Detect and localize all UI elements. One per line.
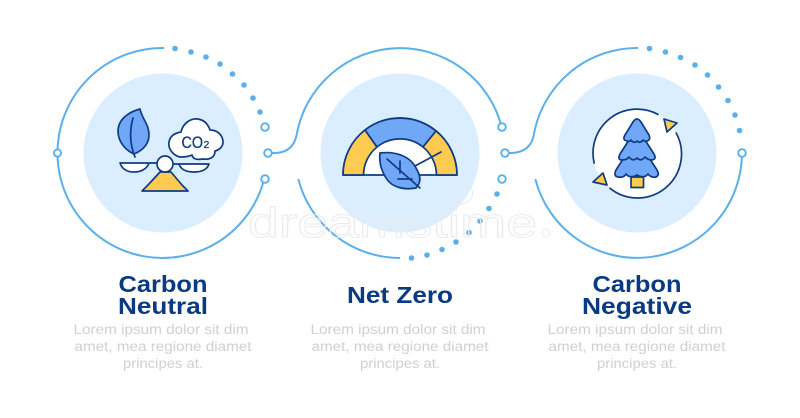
heading: carbon neutral: Carbon — [118, 271, 208, 297]
tree tier top — [624, 119, 650, 142]
icon: gauge with leaf — [343, 118, 457, 189]
body text 2: amet, mea regione diamet — [312, 339, 489, 354]
body text 3: amet, mea regione diamet — [548, 339, 726, 354]
bottom ring arc 3 — [535, 153, 742, 258]
heading: carbon neutral: Neutral — [118, 293, 208, 319]
leaf — [380, 153, 420, 189]
dotted arc 1 — [172, 46, 263, 115]
cycle arc top — [593, 109, 658, 163]
ring arc 1 — [57, 48, 264, 258]
heading: net zero: Net Zero — [347, 282, 453, 308]
gauge right segment — [423, 131, 457, 175]
arrowhead top — [664, 119, 677, 132]
watermark: dreamstime — [248, 199, 537, 246]
body text 3: Lorem ipsum dolor sit dim — [548, 322, 722, 337]
connector and top ring arc 2 — [268, 48, 502, 153]
dotted arc 2 — [409, 191, 500, 261]
arrowhead bottom — [593, 173, 607, 185]
pale circle backdrop 3 — [558, 74, 716, 232]
gauge middle segment — [365, 118, 436, 147]
ring nodes 3 — [501, 149, 746, 157]
bottom ring arc 2 — [298, 179, 400, 258]
body text 1: Lorem ipsum dolor sit dim — [74, 322, 248, 337]
gauge inner — [343, 118, 457, 175]
white disc — [593, 109, 681, 197]
panel: net zero — [264, 48, 506, 371]
leaf — [118, 109, 149, 154]
body text 1: amet, mea regione diamet — [74, 339, 252, 354]
heading: carbon negative: Carbon — [592, 271, 682, 297]
CO2 label: 2 — [204, 139, 210, 151]
ring nodes 2 — [264, 123, 506, 183]
CO2 label: CO — [182, 133, 203, 152]
body text 2: Lorem ipsum dolor sit dim — [310, 322, 486, 337]
cloud — [169, 119, 223, 159]
body text 3: principes at. — [597, 356, 677, 371]
heading: carbon neutral — [118, 271, 208, 319]
panel: carbon negative — [501, 46, 746, 371]
leaf stem — [131, 118, 135, 157]
body text 1 — [74, 322, 252, 371]
icon: tree in cycle arrows — [593, 109, 682, 198]
pale circle backdrop 1 — [84, 74, 242, 232]
left pan — [120, 163, 158, 172]
watermark — [248, 182, 550, 246]
body text 1: principes at. — [123, 356, 203, 371]
leaf veins — [387, 159, 420, 188]
heading: carbon negative: Negative — [582, 293, 692, 319]
right pan — [172, 164, 209, 172]
panel: carbon neutral — [54, 46, 269, 371]
tree tier middle — [619, 140, 655, 160]
pivot — [157, 156, 173, 172]
body text 2: principes at. — [360, 356, 440, 371]
cycle arc bottom — [610, 133, 682, 198]
tree tier bottom — [615, 156, 658, 177]
heading: carbon negative — [582, 271, 692, 319]
dotted arc 3 — [647, 46, 742, 133]
trunk — [631, 177, 644, 188]
gauge left segment — [343, 130, 377, 175]
body text 3 — [548, 322, 726, 371]
icon: balance scale with leaf and CO2 cloud — [118, 109, 223, 191]
pale circle backdrop 2 — [320, 74, 480, 232]
needle — [415, 152, 441, 166]
body text 2 — [310, 322, 489, 371]
connector and top ring arc 3 — [505, 48, 638, 153]
base — [142, 172, 188, 191]
ring nodes 1 — [54, 123, 269, 183]
